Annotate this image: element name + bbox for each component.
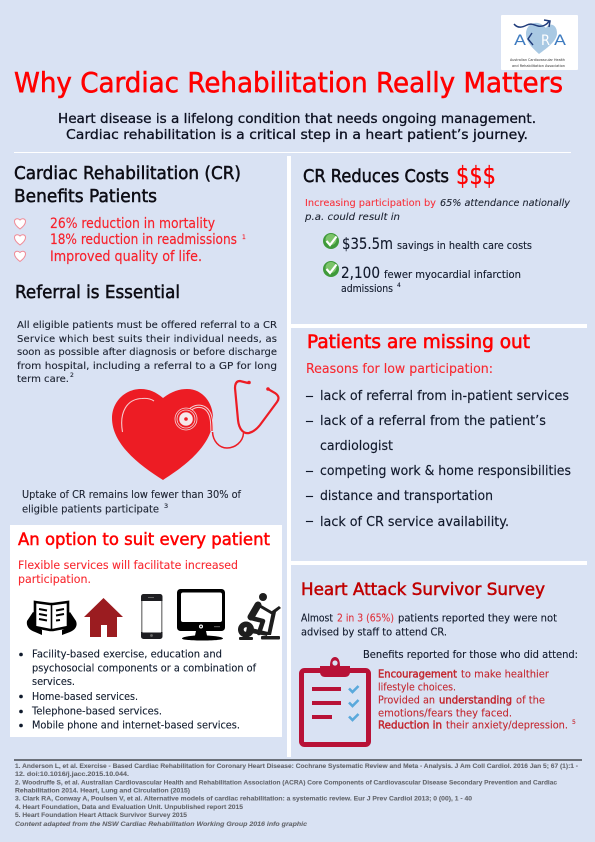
reasons list: cardiologist [320, 438, 393, 454]
admissions stat: fewer myocardial infarction [384, 269, 521, 281]
survey benefits: their anxiety/depression. [446, 720, 568, 732]
benefits list: Improved quality of life. [50, 249, 202, 265]
intro text [58, 112, 536, 143]
intro text: Cardiac rehabilitation is a critical step in a heart patient’s journey. [66, 128, 528, 143]
referral text: Service which best suits their individual needs, as [17, 334, 277, 345]
panel: benefits [14, 164, 246, 265]
referral text: All eligible patients must be offered referral to a CR [17, 320, 277, 331]
survey benefits [378, 668, 576, 732]
uptake text: 3 [164, 502, 168, 510]
references: 2. Woodruffe S, et al. Australian Cardiovascular Health and Rehabilitation Association (ACRA) Core Components of Cardiovascular Disease Secondary Prevention and Cardiac [15, 780, 557, 786]
admissions stat: 4 [397, 282, 401, 289]
reasons list: lack of CR service availability. [320, 514, 509, 530]
survey benefits: understanding [439, 694, 512, 706]
panel: survey [301, 580, 578, 744]
logo: ACRA: Australian Cardiovascular Health [510, 58, 565, 62]
dollar signs: $$$ [456, 161, 496, 190]
costs intro [304, 198, 571, 223]
options list: Telephone-based services. [31, 706, 162, 718]
admissions stat [341, 263, 521, 295]
survey benefits: of the [516, 694, 545, 706]
panel: options [10, 525, 282, 737]
benefits list [50, 216, 246, 265]
reasons list [306, 388, 571, 530]
survey benefits: 5 [572, 719, 576, 726]
options subheading [18, 558, 238, 586]
heading: benefits: Cardiac Rehabilitation (CR) [14, 164, 241, 184]
logo: ACRA: and Rehabilitation Association [512, 64, 565, 68]
intro text: Heart disease is a lifelong condition that needs ongoing management. [58, 112, 536, 127]
options list: psychosocial components or a combination of [32, 662, 256, 674]
icon: phone [141, 594, 162, 639]
title: Why Cardiac Rehabilitation Really Matters [14, 67, 563, 99]
icon: newspaper [27, 602, 77, 635]
survey finding: Benefits reported for those who did attend: [363, 649, 578, 661]
uptake text: Uptake of CR remains low fewer than 30% of [22, 490, 241, 501]
uptake text [22, 490, 241, 516]
referral text [17, 320, 277, 385]
referral text: from hospital, including a referral to a GP for long [17, 361, 277, 372]
survey benefits: Encouragement [378, 668, 457, 680]
survey benefits: to make healthier [461, 668, 550, 680]
benefits list: 1 [242, 234, 246, 241]
survey finding [301, 612, 578, 661]
icon: heart with stethoscope [112, 381, 278, 480]
options list: services. [32, 676, 75, 688]
heading: survey: Heart Attack Survivor Survey [301, 580, 545, 600]
benefits list: 18% reduction in readmissions [50, 232, 237, 248]
survey benefits: lifestyle choices. [378, 682, 456, 694]
survey benefits: emotions/fears they faced. [378, 708, 512, 720]
options subheading: Flexible services will facilitate increased [18, 558, 238, 572]
references: 3. Clark RA, Conway A, Poulsen V, et al. Alternative models of cardiac rehabilitation: a systematic review. Eur J Prev Cardiol 2013; 0 (00), 1 - 40 [15, 796, 472, 802]
admissions stat: 2,100 [341, 263, 380, 282]
references: 5. Heart Foundation Heart Attack Survivor Survey 2015 [15, 812, 187, 819]
options list: Mobile phone and internet-based services. [32, 720, 240, 732]
logo: ACRA: A [554, 33, 567, 49]
reasons list: distance and transportation [320, 488, 493, 504]
saving stat [342, 234, 532, 253]
references [14, 760, 582, 828]
options list [19, 648, 256, 732]
reasons subheading: Reasons for low participation: [306, 361, 493, 377]
references: 12. doi:10.1016/j.jacc.2015.10.044. [15, 771, 129, 778]
icon: check two [323, 261, 339, 277]
references: 4. Heart Foundation, Data and Evaluation Unit. Unpublished report 2015 [15, 804, 243, 811]
references: Rehabilitation 2014. Heart, Lung and Circulation (2015) [15, 788, 190, 794]
saving stat: $35.5m [342, 234, 393, 253]
icon: check one [323, 233, 339, 249]
survey finding: 2 in 3 (65%) [337, 612, 394, 624]
reasons list: lack of referral from in-patient services [320, 388, 569, 404]
benefits list: 26% reduction in mortality [50, 216, 215, 232]
panel: referral [15, 283, 278, 516]
icon: clipboard [302, 657, 368, 744]
heading: benefits: Benefits Patients [14, 187, 157, 207]
costs intro: p.a. could result in [304, 212, 400, 223]
icon: monitor [177, 589, 225, 640]
referral text: term care. [17, 374, 69, 385]
options list: Facility-based exercise, education and [32, 648, 222, 660]
logo: ACRA [501, 15, 578, 70]
referral text: soon as possible after diagnosis or before discharge [17, 347, 277, 358]
heading: options: An option to suit every patient [18, 530, 270, 550]
referral text: 2 [70, 372, 74, 379]
costs intro: 65% attendance nationally [440, 198, 571, 209]
heading: benefits [14, 164, 241, 207]
saving stat: savings in health care costs [397, 240, 532, 252]
heading: costs: CR Reduces Costs [303, 167, 449, 187]
reasons list: lack of a referral from the patient’s [320, 413, 546, 429]
icon: house [84, 598, 123, 637]
survey finding: Almost [301, 612, 333, 624]
survey benefits: Provided an [378, 694, 435, 706]
survey benefits: Reduction in [378, 720, 442, 732]
references: 1. Anderson L, et al. Exercise - Based Cardiac Rehabilitation for Coronary Heart Disease: Cochrane Systematic Review and Meta - Analysis. J Am Coll Cardiol. 2016 Jan 5; 67 (1):1 - [15, 763, 578, 770]
reasons list: competing work & home responsibilities [320, 463, 571, 479]
survey finding: advised by staff to attend CR. [301, 626, 447, 638]
icons: heart bullets [14, 219, 26, 262]
references: Content adapted from the NSW Cardiac Rehabilitation Working Group 2016 info graphic [15, 821, 307, 828]
heading: referral: Referral is Essential [15, 283, 180, 303]
admissions stat: admissions [341, 283, 393, 295]
survey finding: patients reported they were not [398, 612, 557, 624]
panel: missing out [306, 331, 571, 530]
logo: ACRA: A [514, 33, 527, 49]
heading: missing out: Patients are missing out [307, 331, 530, 353]
options subheading: participation. [18, 572, 91, 586]
icon: exercise bike [238, 593, 281, 640]
costs intro: Increasing participation by [305, 198, 436, 209]
options list: Home-based services. [32, 691, 138, 703]
uptake text: eligible patients participate [22, 504, 159, 516]
panel: costs [303, 161, 571, 295]
logo: ACRA: R [541, 33, 550, 49]
